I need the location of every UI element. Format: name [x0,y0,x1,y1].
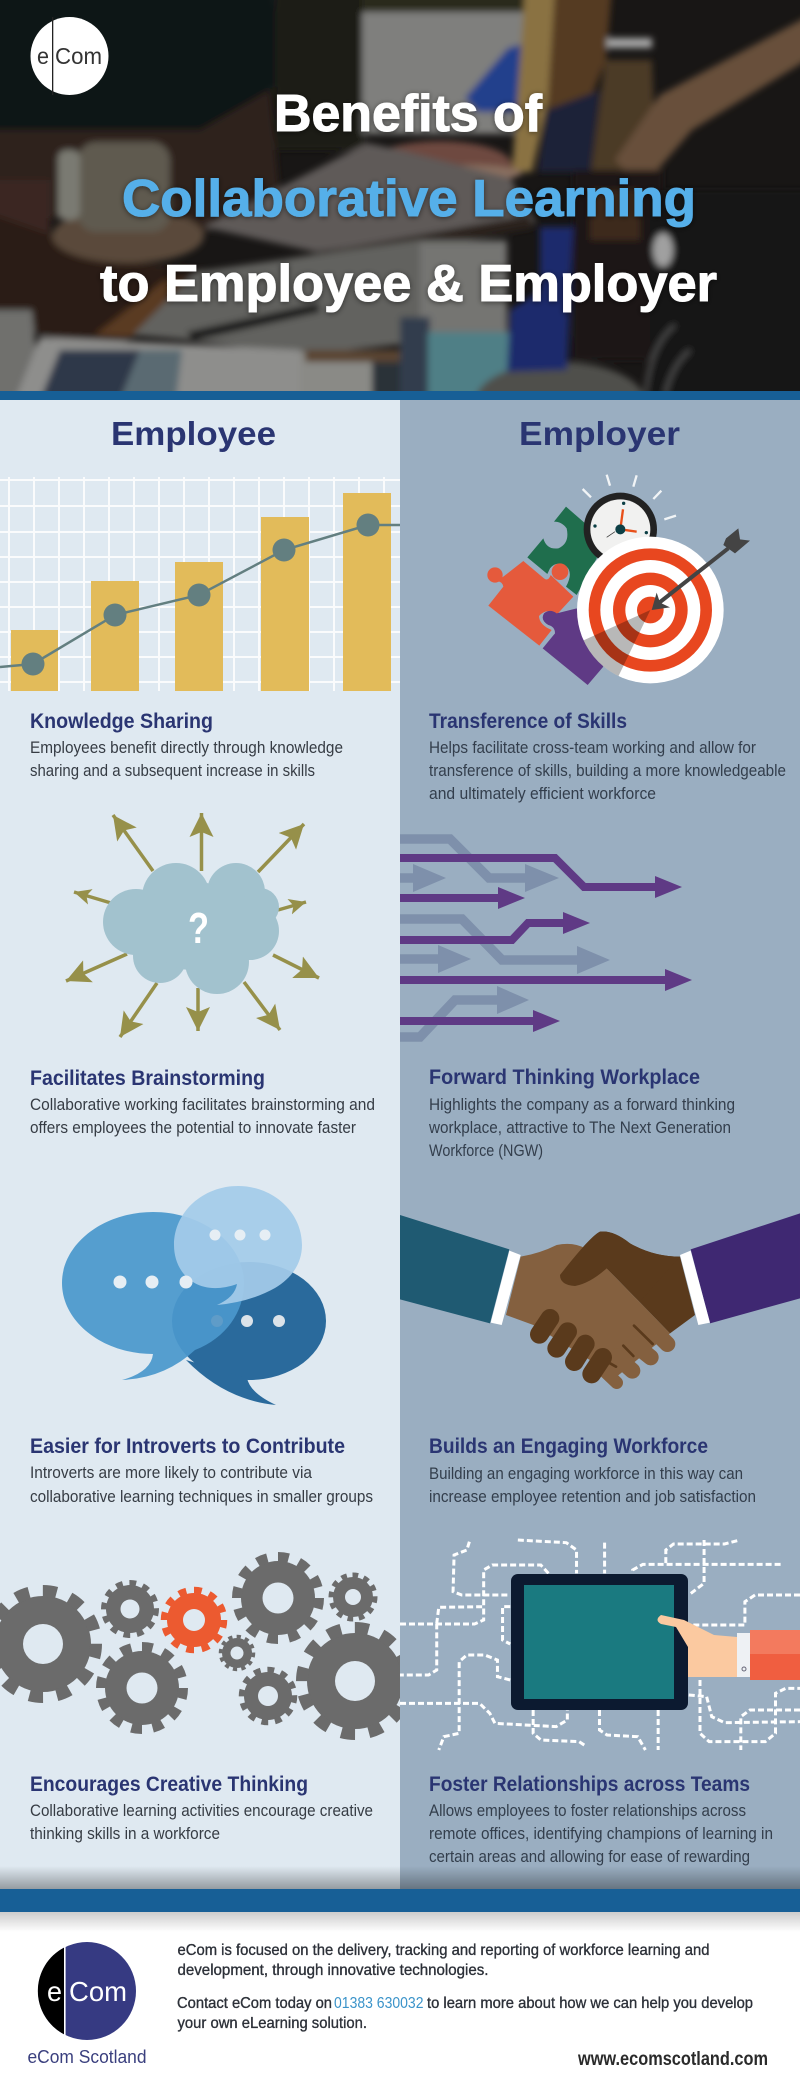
text block: engaging workforce: increase employee retention and job satisfaction [429,1488,756,1506]
footer contact text: your own eLearning solution. [178,2015,367,2032]
text block: engaging workforce: Building an engaging workforce in this way can [429,1465,743,1483]
text block: knowledge sharing: sharing and a subsequent increase in skills [30,762,315,780]
icon: puzzle, clock and target [487,475,750,685]
text block: easier for introverts: Easier for Introverts to Contribute [30,1435,345,1458]
footer contact text: 01383 630032 [334,1995,424,2012]
header photo background [0,0,800,391]
text block: knowledge sharing: Employees benefit directly through knowledge [30,739,343,757]
shadow above footer band [0,1866,800,1889]
text block: forward thinking workplace [428,1066,735,1160]
text block: easier for introverts: Introverts are more likely to contribute via [30,1464,313,1482]
icon: forward pointing arrows [400,839,692,1037]
text block: foster relationships [429,1773,773,1866]
text block: transference of skills: Helps facilitate cross-team working and allow for [429,739,756,757]
icon: handshake [400,1213,800,1383]
text block: transference of skills: and ultimately efficient workforce [429,785,656,803]
chart: rising bars and trend line [0,477,400,691]
icon: speech bubbles [62,1186,326,1405]
text block: transference of skills: Transference of Skills [429,710,627,733]
text block: creative thinking: Collaborative learning activities encourage creative [30,1802,373,1820]
icon: tablet with circuit lines [400,1540,800,1750]
text block: easier for introverts: collaborative learning techniques in smaller groups [30,1488,373,1506]
logo: footer eCom [38,1942,136,2040]
logo: header eCom: Com [55,43,102,69]
text block: foster relationships: certain areas and allowing for ease of rewarding [429,1848,750,1866]
icon: brainstorm cloud with arrows: ? [188,904,209,953]
text block: knowledge sharing [30,710,343,780]
text block: facilitates brainstorming: Facilitates Brainstorming [30,1067,265,1090]
footer contact text: Contact eCom today on [177,1995,332,2012]
footer contact text: to learn more about how we can help you develop [427,1995,753,2012]
text block: facilitates brainstorming [30,1067,375,1137]
logo: header eCom [30,17,108,95]
text block: foster relationships: Foster Relationships across Teams [429,1773,750,1796]
icon: gears [0,1557,408,1734]
text block: engaging workforce [429,1435,756,1506]
text block: facilitates brainstorming: Collaborative working facilitates brainstorming and [30,1096,375,1114]
footer about text [178,1942,710,1979]
logo: footer eCom: e [47,1976,62,2007]
title: to Employee & Employer [100,255,717,313]
title [100,85,717,313]
text block: transference of skills [429,710,786,803]
text block: forward thinking workplace: Forward Thinking Workplace [429,1066,700,1089]
header divider band [0,391,800,400]
text block: creative thinking: thinking skills in a workforce [30,1825,220,1843]
panel: employee [0,400,400,1889]
text block: knowledge sharing: Knowledge Sharing [30,710,213,733]
text block: foster relationships: Allows employees to foster relationships across [429,1802,746,1820]
logo caption: eCom Scotland [28,2046,146,2067]
text block: forward thinking workplace: workplace, attractive to The Next Generation [428,1119,731,1137]
footer contact text [177,1995,753,2032]
logo: footer eCom: Com [69,1976,127,2007]
title: Collaborative Learning [122,170,696,228]
text block: engaging workforce: Builds an Engaging Workforce [429,1435,708,1458]
footer band [0,1889,800,1912]
text block: facilitates brainstorming: offers employees the potential to innovate faster [30,1119,356,1137]
footer about text: development, through innovative technologies. [178,1962,488,1979]
text block: creative thinking: Encourages Creative Thinking [30,1773,308,1796]
text block: forward thinking workplace: Highlights the company as a forward thinking [429,1096,735,1114]
shadow below footer band [0,1912,800,1932]
logo: header eCom: e [37,43,49,69]
website url: www.ecomscotland.com [577,2049,768,2070]
panel: employer [400,400,800,1889]
icon: brainstorm cloud with arrows [66,813,319,1037]
text block: easier for introverts [30,1435,373,1506]
text block: creative thinking [30,1773,373,1843]
text block: forward thinking workplace: Workforce (NGW) [429,1142,543,1160]
text block: foster relationships: remote offices, identifying champions of learning in [429,1825,773,1843]
title: Benefits of [274,85,543,143]
footer about text: eCom is focused on the delivery, tracking and reporting of workforce learning and [178,1942,710,1959]
heading: employer: Employer [519,415,680,452]
heading: employee: Employee [111,415,276,452]
